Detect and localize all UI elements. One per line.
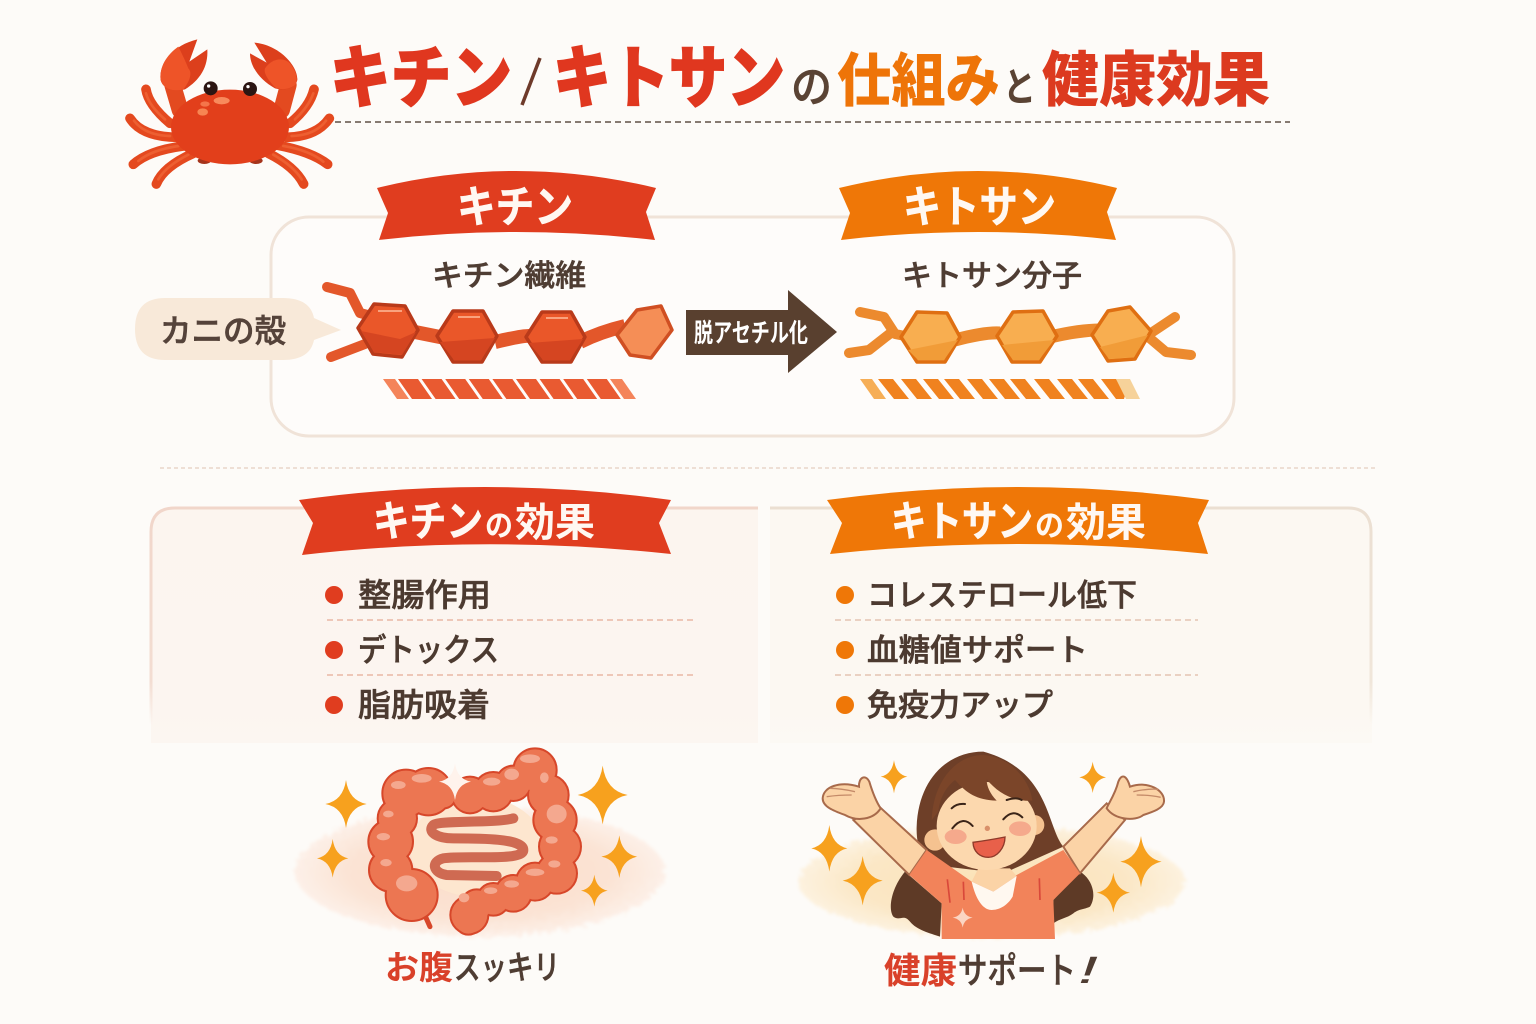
list: chitosan effects: 免疫力アップ — [867, 688, 1053, 723]
ribbon: chitosan effects: の — [1035, 510, 1064, 543]
panel: chitin effects — [151, 487, 758, 743]
title: 仕組み — [837, 49, 1000, 114]
list: chitosan effects — [835, 578, 1198, 723]
title: キトサン — [553, 41, 785, 117]
crab illustration — [130, 39, 329, 184]
chitin fiber strip — [383, 379, 636, 399]
ribbon: chitin — [377, 171, 656, 240]
ribbon: chitin effects: 効果 — [515, 501, 595, 545]
ribbon: chitin: キチン — [457, 183, 573, 232]
illustration: happy girl — [798, 752, 1185, 939]
caption: belly refreshed: お腹 — [385, 949, 453, 986]
title: キチン — [330, 41, 512, 117]
callout: crab shell — [135, 298, 341, 360]
title — [330, 41, 1270, 117]
caption: health support — [884, 950, 1099, 992]
list: chitin effects: デトックス — [358, 632, 499, 668]
panel: chitin to chitosan mechanism — [135, 171, 1234, 436]
list: chitin effects: 整腸作用 — [358, 577, 491, 613]
ribbon: chitin effects: の — [485, 510, 513, 543]
caption: belly refreshed: スッキリ — [454, 949, 560, 986]
label: chitosan molecule: キトサン分子 — [902, 260, 1082, 293]
caption: health support: 健康 — [884, 950, 957, 991]
chitin molecule chain — [327, 287, 672, 362]
list: chitosan effects: 血糖値サポート — [867, 633, 1088, 668]
list: chitin effects: 脂肪吸着 — [358, 687, 490, 723]
ribbon: chitosan effects: キトサン — [891, 498, 1033, 545]
callout: crab shell: カニの殻 — [160, 313, 286, 349]
caption: health support: サポート — [958, 950, 1076, 991]
title: 健康効果 — [1042, 47, 1270, 114]
label: chitin fiber: キチン繊維 — [432, 260, 586, 293]
chitosan fiber strip — [860, 379, 1140, 399]
arrow: deacetylation — [686, 290, 837, 373]
chitosan molecule chain — [849, 307, 1191, 362]
arrow: deacetylation: 脱アセチル化 — [694, 318, 808, 348]
caption: health support: ! — [1078, 950, 1099, 992]
ribbon: chitosan: キトサン — [903, 183, 1056, 232]
list: chitosan effects: コレステロール低下 — [867, 578, 1137, 613]
title: と — [1003, 66, 1036, 110]
ribbon: chitosan effects: 効果 — [1066, 501, 1146, 545]
ribbon: chitin effects: キチン — [373, 498, 483, 545]
ribbon: chitosan effects — [827, 487, 1209, 554]
title: の — [791, 63, 832, 112]
caption: belly refreshed — [385, 949, 560, 986]
list: chitin effects — [325, 577, 696, 723]
illustration: intestine — [295, 749, 665, 937]
ribbon: chitosan — [839, 171, 1117, 240]
panel: chitosan effects — [770, 487, 1372, 743]
ribbon: chitin effects — [299, 487, 671, 555]
